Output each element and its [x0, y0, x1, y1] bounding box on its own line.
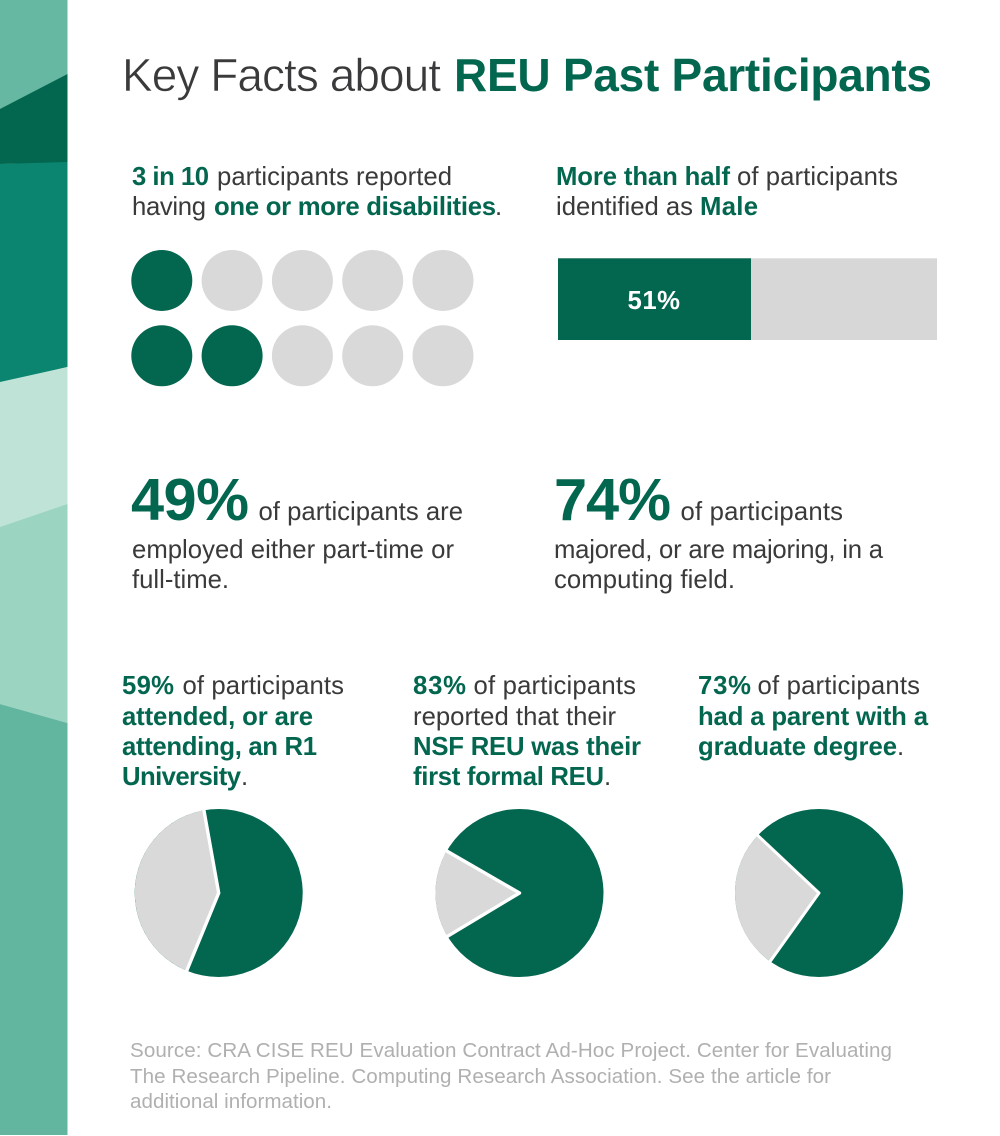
text block: 73% parent degree: 73%	[698, 672, 751, 700]
text block: 59% R1: .	[241, 763, 248, 791]
text block: disabilities: having	[132, 193, 206, 221]
text block: 83% first REU: first formal REU	[413, 763, 604, 791]
text block: disabilities	[132, 163, 502, 221]
icon array: 3 of 10 dots filled	[131, 250, 474, 386]
text block: male participants: Male	[700, 193, 758, 221]
text block: 83% first REU: 83%	[413, 672, 466, 700]
text block: disabilities: .	[495, 193, 502, 221]
pie chart: 83%	[435, 809, 604, 977]
source note: Source: CRA CISE REU Evaluation Contract Ad-Hoc Project. Center for Evaluating	[130, 1039, 892, 1062]
text block: 83% first REU: NSF REU was their	[413, 733, 641, 761]
pie chart: 73%	[735, 809, 903, 977]
text block: 83% first REU: reported that their	[413, 703, 616, 731]
stat: 74% computing: 74%	[554, 466, 671, 533]
source note: additional information.	[130, 1090, 332, 1113]
stat: 49% employed: employed either part-time or	[132, 536, 454, 564]
text block: male participants	[556, 163, 898, 221]
text block: 83% first REU: of participants	[474, 672, 636, 700]
text block: 59% R1: 59%	[122, 672, 174, 700]
text block: 73% parent degree: graduate degree	[698, 733, 897, 761]
text block: 73% parent degree	[698, 672, 929, 761]
stat: 74% computing: of participants	[680, 498, 843, 526]
text block: male participants: More than half	[556, 163, 730, 191]
pie chart: 59%	[135, 808, 303, 977]
sidebar: layered green bands	[0, 0, 68, 1135]
source note	[130, 1039, 892, 1113]
text block: male participants: identified as	[556, 193, 693, 221]
text block: 59% R1: of participants	[182, 672, 344, 700]
text block: disabilities: participants reported	[217, 163, 452, 191]
text block: 59% R1: attended, or are	[122, 703, 313, 731]
title: REU Past Participants	[454, 49, 932, 101]
stat: 49% employed: of participants are	[258, 498, 463, 526]
text block: disabilities: 3 in 10	[132, 163, 209, 191]
text block: 73% parent degree: of participants	[758, 672, 920, 700]
bar chart: 51% male: 51%	[628, 287, 680, 315]
stat: 49% employed: full-time.	[132, 566, 229, 594]
text block: disabilities: one or more disabilities	[214, 193, 496, 221]
source note: The Research Pipeline. Computing Research Association. See the article for	[130, 1065, 831, 1088]
stat: 74% computing: majored, or are majoring, in a	[554, 536, 884, 564]
title: Key Facts about	[122, 49, 441, 101]
text block: 83% first REU: .	[604, 763, 611, 791]
text block: 73% parent degree: had a parent with a	[698, 703, 929, 731]
text block: 83% first REU	[413, 672, 641, 791]
title	[122, 49, 932, 101]
bar chart: 51% male	[558, 258, 937, 340]
stat: 49% employed	[131, 466, 463, 594]
text block: 59% R1: attending, an R1	[122, 733, 317, 761]
text block: 59% R1: University	[122, 763, 242, 791]
stat: 74% computing: computing field.	[554, 566, 735, 594]
text block: 59% R1	[122, 672, 344, 791]
stat: 74% computing	[554, 466, 884, 594]
stat: 49% employed: 49%	[131, 466, 249, 533]
text block: male participants: of participants	[737, 163, 898, 191]
text block: 73% parent degree: .	[897, 733, 904, 761]
